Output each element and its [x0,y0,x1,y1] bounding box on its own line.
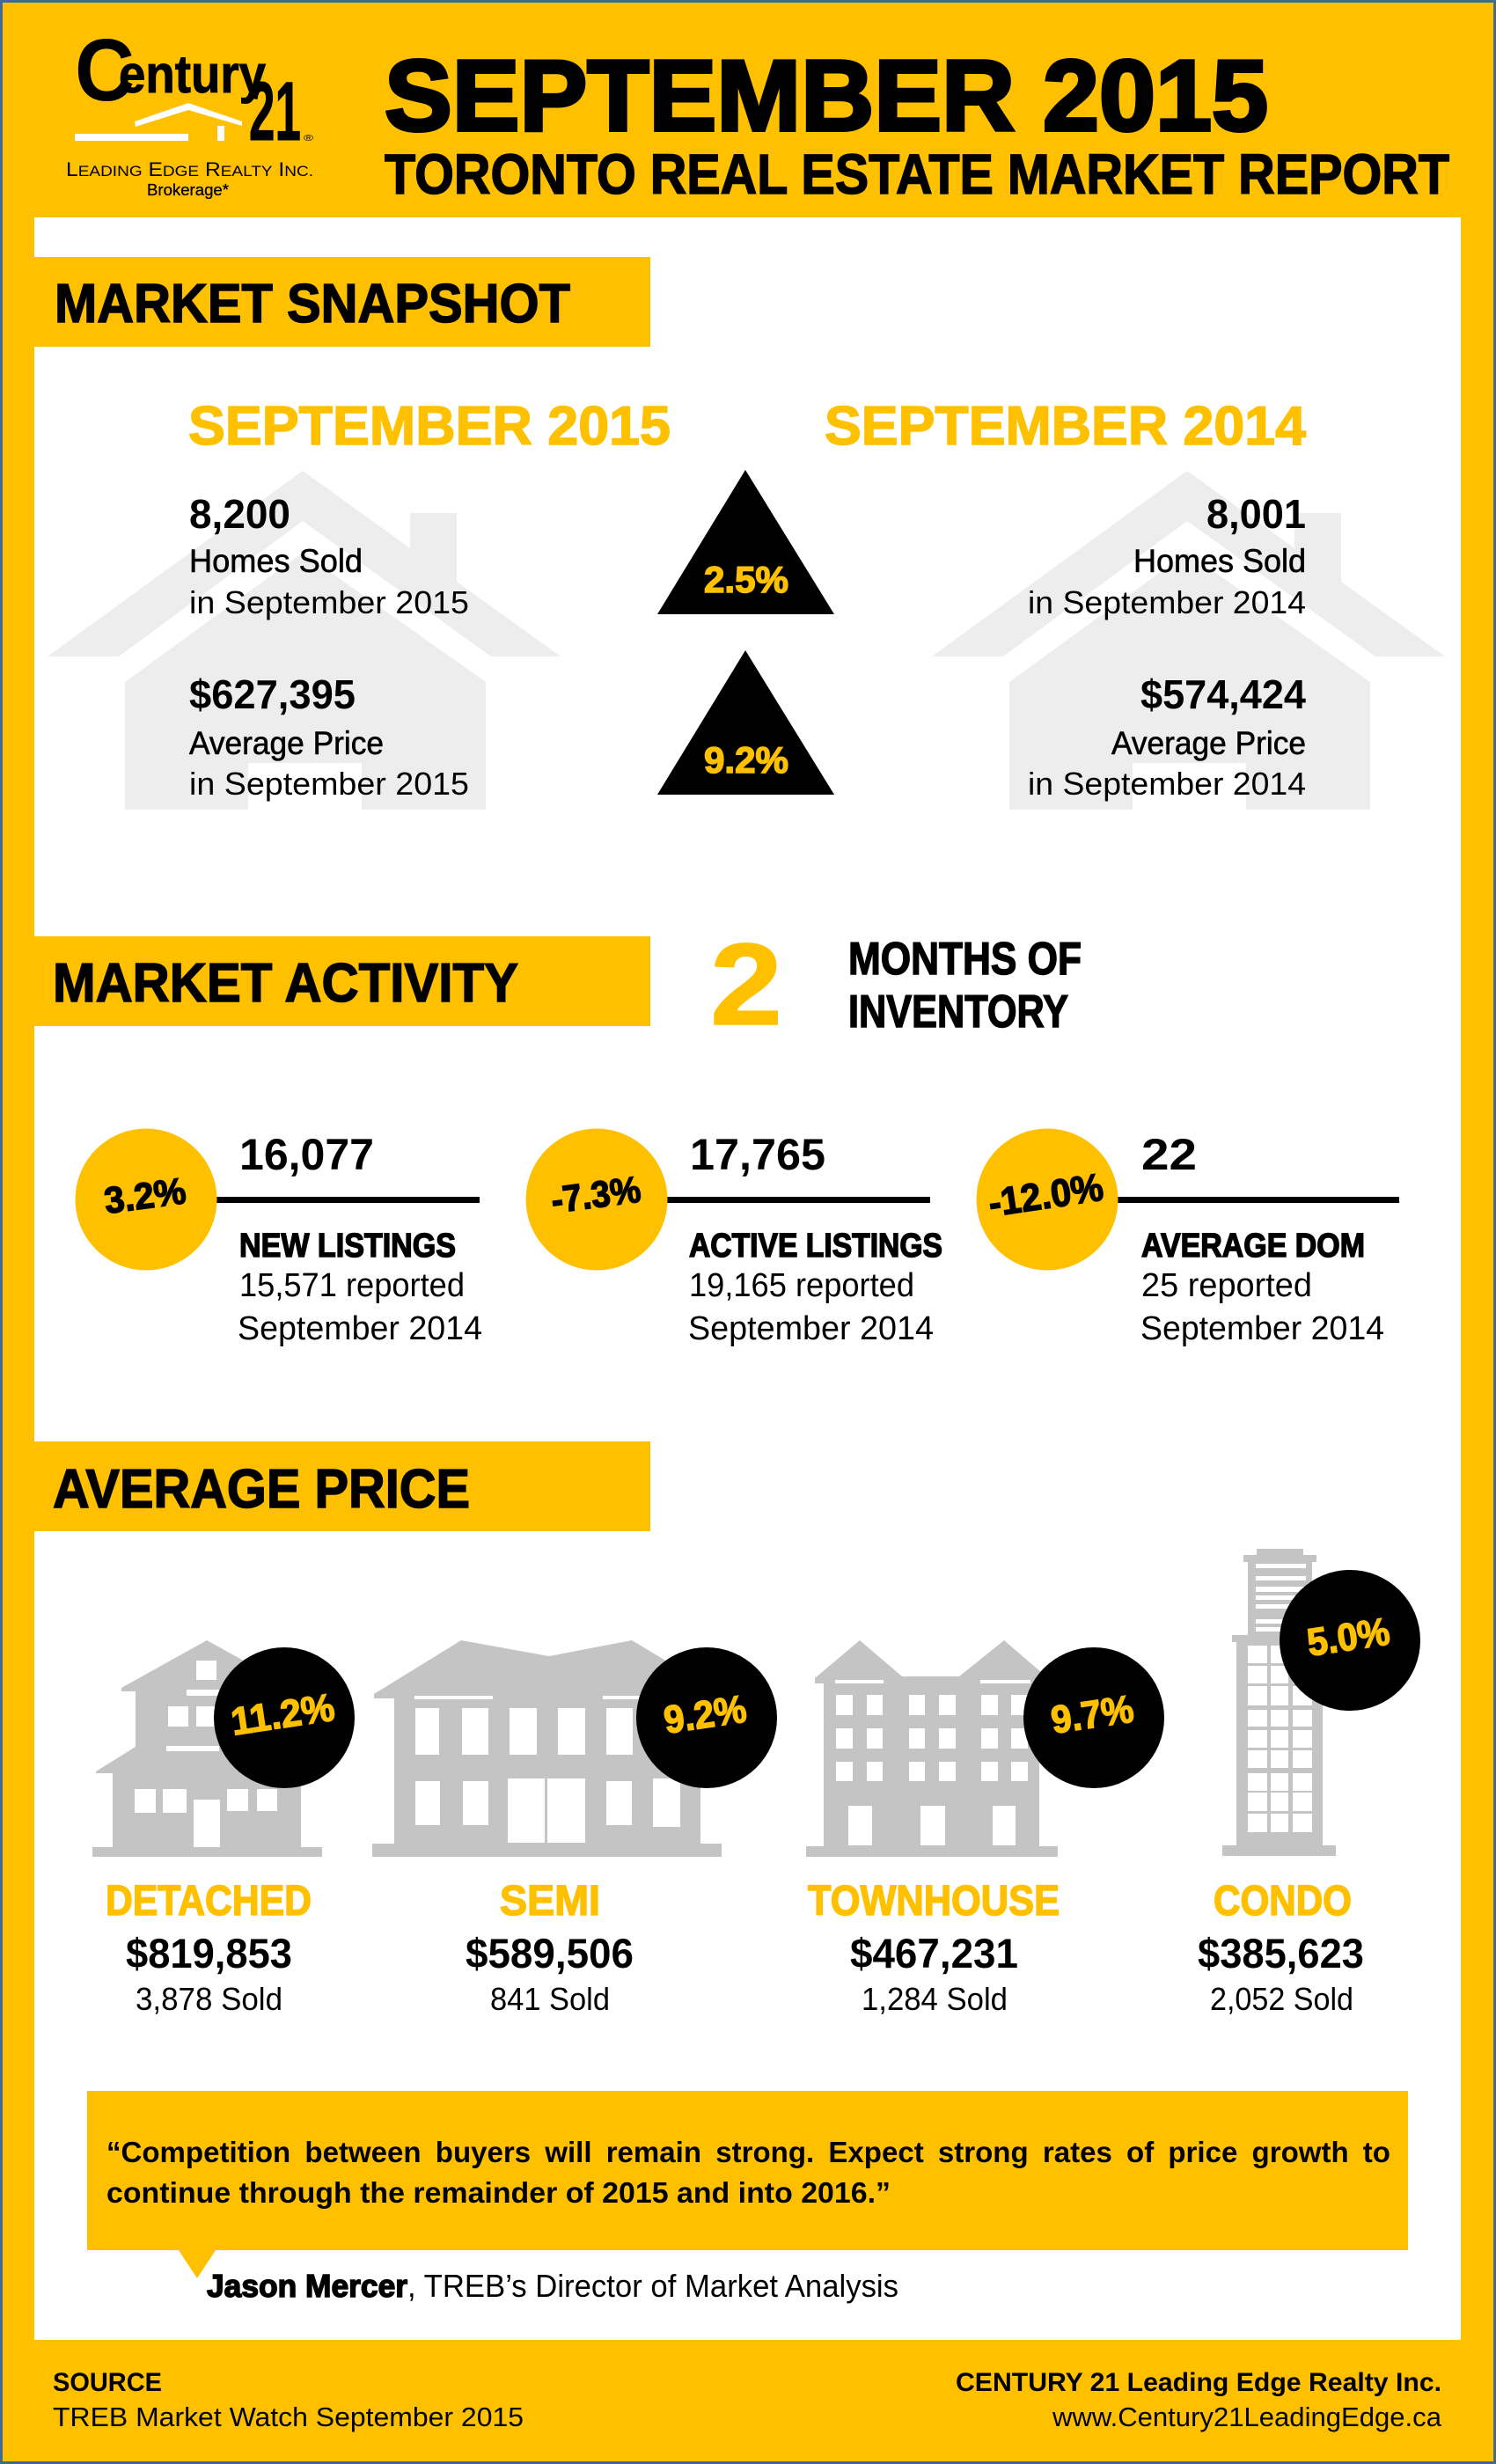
logo: Century 21 Leading Edge Realty: Brokerage* [147,181,229,199]
stat: average price 2015 [189,671,469,802]
badge: townhouse change [1023,1647,1164,1788]
footer: source: TREB Market Watch September 2015 [53,2402,524,2432]
quote text [106,2136,1390,2209]
triangle: homes sold change [657,470,834,614]
stat: average price 2014: in September 2014 [1028,766,1306,802]
metric: new listings: September 2014 [238,1310,482,1347]
section heading: average price [34,1441,650,1531]
logo: Century 21 Leading Edge Realty: LEADING EDGE REALTY INC. [66,158,313,180]
badge: condo change: 5.0% [1304,1610,1392,1665]
column heading: September 2014: SEPTEMBER 2014 [825,396,1307,457]
metric: new listings: 3.2% [102,1170,188,1221]
callout: quote [87,2091,1408,2278]
icon: detached house [92,1640,322,1857]
stat: average price 2015: in September 2015 [189,766,469,802]
section heading: market activity: MARKET ACTIVITY [53,953,518,1014]
badge: semi change: 9.2% [661,1687,749,1742]
stat: homes sold 2015: 8,200 [189,491,290,537]
section heading: market activity [34,936,650,1026]
metric: active listings: -7.3% [549,1169,643,1221]
months of inventory: 2 [710,920,782,1049]
icon: condo tower [1222,1549,1336,1856]
label: condo price [1198,1878,1364,2017]
stat: homes sold 2014: in September 2014 [1028,584,1306,620]
triangle: homes sold change: 2.5% [704,559,788,600]
metric: average days on market: 25 reported [1141,1267,1312,1304]
stat: average price 2014: Average Price [1111,725,1306,761]
logo: Century 21 Leading Edge Realty: ® [304,134,314,143]
metric: average days on market [977,1128,1399,1347]
label: detached price [106,1878,312,2017]
header [66,21,1449,206]
icon: townhouse [806,1640,1058,1857]
badge: detached change: 11.2% [228,1686,337,1744]
label: detached price: $819,853 [126,1930,292,1976]
metric: active listings: 17,765 [690,1130,825,1179]
quote attribution: , TREB’s Director of Market Analysis [407,2268,898,2304]
metric: new listings: NEW LISTINGS [239,1228,456,1265]
stat: average price 2015: Average Price [189,725,384,761]
column heading: September 2015: SEPTEMBER 2015 [188,396,671,457]
icon: house watermark left [48,471,561,810]
badge: townhouse change: 9.7% [1048,1687,1136,1742]
label: condo price: 2,052 Sold [1210,1981,1353,2017]
logo: Century 21 Leading Edge Realty: entury [119,45,267,104]
stat: homes sold 2014 [1028,491,1306,620]
stat: homes sold 2015: in September 2015 [189,584,469,620]
quote attribution [207,2268,898,2304]
panel: market snapshot [34,257,1445,810]
stat: average price 2014 [1028,671,1306,802]
section heading: average price: AVERAGE PRICE [53,1459,470,1520]
metric: new listings [76,1128,482,1347]
section heading: market snapshot: MARKET SNAPSHOT [55,274,570,334]
quote text: continue through the remainder of 2015 and into 2016.” [106,2176,891,2209]
metric: average days on market: September 2014 [1140,1310,1384,1347]
label: condo price: CONDO [1214,1878,1352,1925]
footer: company: CENTURY 21 Leading Edge Realty Inc. [956,2368,1441,2397]
months of inventory: INVENTORY [848,986,1068,1038]
label: semi price: 841 Sold [490,1981,610,2017]
metric: average days on market: 22 [1141,1130,1197,1179]
stat: homes sold 2015 [189,491,469,620]
title: SEPTEMBER 2015 [385,40,1268,152]
label: semi price: $589,506 [466,1930,634,1976]
badge: detached change [214,1647,355,1788]
months of inventory [710,920,1082,1049]
metric: average days on market: -12.0% [986,1166,1106,1225]
metric: active listings [526,1128,942,1347]
stat: homes sold 2015: Homes Sold [189,543,363,579]
label: condo price: $385,623 [1198,1930,1364,1976]
stat: average price 2014: $574,424 [1140,671,1306,717]
label: semi price: SEMI [500,1878,600,1925]
footer: company: www.Century21LeadingEdge.ca [1052,2402,1442,2432]
label: townhouse price: 1,284 Sold [862,1981,1008,2017]
quote attribution: Jason Mercer [207,2268,407,2304]
metric: new listings: 15,571 reported [239,1267,465,1304]
stat: average price 2015: $627,395 [189,671,356,717]
label: detached price: DETACHED [106,1878,312,1925]
icon: semi-detached house [372,1640,722,1857]
triangle: average price change [657,650,834,795]
section heading: market snapshot [34,257,650,347]
footer: company [956,2368,1442,2432]
label: semi price [466,1878,634,2017]
panel: market activity [34,920,1399,1347]
metric: average days on market: AVERAGE DOM [1141,1228,1365,1265]
quote text: “Competition between buyers will remain strong. Expect strong rates of price growth to [106,2136,1390,2168]
panel: average price [34,1441,1420,2017]
badge: condo change [1280,1570,1420,1711]
metric: new listings: 16,077 [239,1130,374,1179]
logo: Century 21 Leading Edge Realty [66,21,314,199]
metric: active listings: September 2014 [688,1310,934,1347]
label: detached price: 3,878 Sold [136,1981,282,2017]
stat: homes sold 2014: Homes Sold [1133,543,1306,579]
metric: active listings: ACTIVE LISTINGS [689,1228,942,1265]
logo: Century 21 Leading Edge Realty: 21 [249,65,301,158]
label: townhouse price: TOWNHOUSE [808,1878,1060,1925]
metric: active listings: 19,165 reported [689,1267,914,1304]
label: townhouse price [808,1878,1060,2017]
logo: Century 21 Leading Edge Realty: C [75,21,135,120]
badge: semi change [636,1647,777,1788]
triangle: average price change: 9.2% [704,739,788,781]
stat: homes sold 2014: 8,001 [1206,491,1306,537]
months of inventory: MONTHS OF [848,934,1082,985]
label: townhouse price: $467,231 [850,1930,1018,1976]
icon: house watermark right [932,471,1445,810]
footer: source [53,2368,524,2432]
footer: source: SOURCE [53,2368,162,2397]
